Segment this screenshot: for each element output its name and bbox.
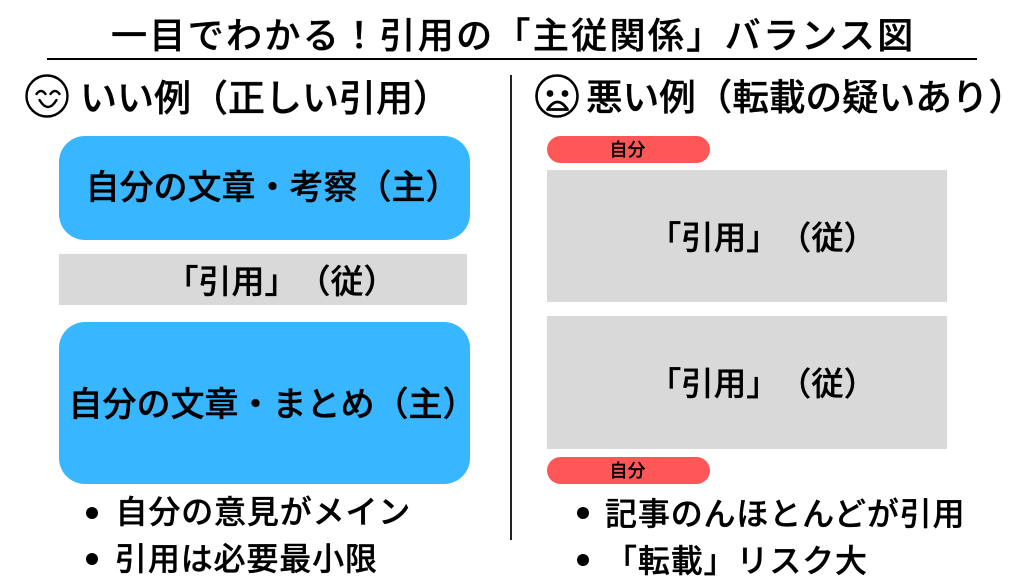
center divider bbox=[510, 75, 512, 540]
box: quotation, top bbox=[547, 170, 947, 302]
panel: bad example bbox=[535, 74, 1024, 579]
bullet: minimum quotation: 引用は必要最小限 bbox=[115, 541, 378, 577]
bullet: reprint risk: 「転載」リスク大 bbox=[605, 543, 868, 579]
icon: sad face bbox=[535, 74, 579, 118]
panel: good example bbox=[25, 74, 476, 577]
heading: good example: いい例（正しい引用） bbox=[80, 78, 450, 119]
title: 一目でわかる！引用の「主従関係」バランス図 bbox=[111, 15, 916, 56]
label: own text, top bbox=[547, 136, 710, 163]
box: own text, consideration: 自分の文章・考察（主） bbox=[86, 169, 460, 207]
box: quotation, top: 「引用」（従） bbox=[649, 220, 876, 256]
icon: smiling face bbox=[25, 74, 69, 118]
box: quotation bbox=[59, 254, 467, 305]
label: own text, top: 自分 bbox=[610, 140, 646, 160]
title underline bbox=[47, 58, 977, 60]
box: own text, consideration bbox=[59, 136, 470, 240]
heading: bad example: 悪い例（転載の疑いあり） bbox=[586, 77, 1024, 118]
box: own text, summary bbox=[59, 322, 470, 484]
bullet: mostly quotation: 記事のんほとんどが引用 bbox=[605, 496, 965, 532]
bullet: own opinion: 自分の意見がメイン bbox=[116, 494, 411, 530]
box: quotation, bottom bbox=[547, 316, 947, 449]
label: own text, bottom: 自分 bbox=[610, 460, 646, 480]
box: quotation: 「引用」（従） bbox=[166, 263, 396, 300]
box: own text, summary: 自分の文章・まとめ（主） bbox=[68, 386, 476, 424]
label: own text, bottom bbox=[547, 457, 710, 484]
box: quotation, bottom: 「引用」（従） bbox=[649, 366, 876, 402]
